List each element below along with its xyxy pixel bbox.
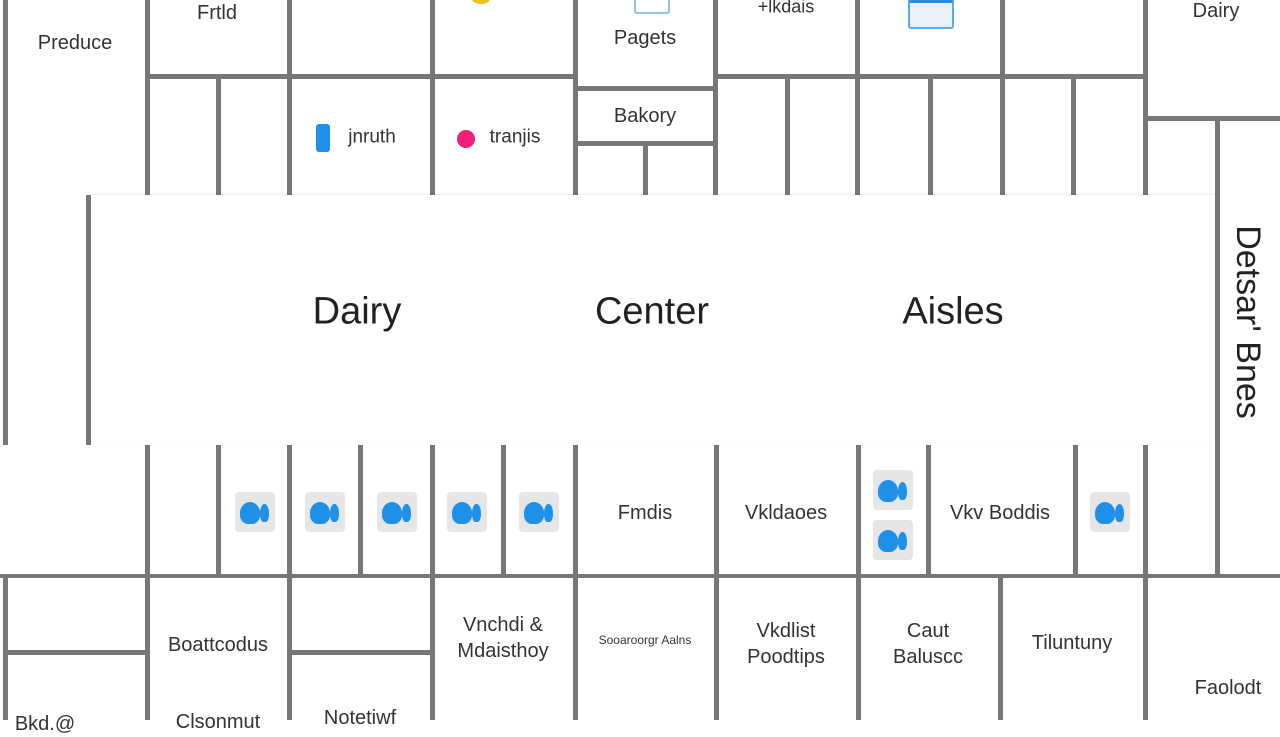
- label Vkdlist: Vkdlist: [757, 620, 815, 642]
- label Frtld: Frtld: [197, 2, 237, 24]
- label Caut: [893, 620, 963, 668]
- label Vkldaoes: Vkldaoes: [745, 502, 827, 524]
- label Vkdlist: [747, 620, 825, 668]
- vertical label right: Detsar' Bnes: [1229, 225, 1267, 419]
- label small: Sooaroorgr Aalns: [599, 633, 691, 647]
- label Bakory: Bakory: [614, 105, 676, 127]
- label Vkv Boddis: Vkv Boddis: [950, 502, 1050, 524]
- label Caut: Caut: [907, 620, 949, 642]
- icon yellow: [472, 0, 490, 4]
- top labels: Preduce: [38, 32, 112, 54]
- icon cube: [908, 0, 954, 29]
- label Notetiwf: Notetiwf: [324, 707, 396, 729]
- icon jnruth: [316, 124, 330, 152]
- center label: Dairy: Dairy: [313, 290, 401, 332]
- bottom labels: Boattcodus: [168, 634, 268, 656]
- icon tranjis: [457, 130, 475, 148]
- label Tiluntuny: Tiluntuny: [1032, 632, 1112, 654]
- label Vnchdi: Mdaisthoy: [457, 640, 549, 662]
- label Vnchdi: [457, 614, 549, 662]
- center band: [91, 195, 1215, 445]
- label Faolodt: Faolodt: [1195, 677, 1261, 699]
- label Dairy top right: Dairy: [1193, 0, 1239, 22]
- middle labels: Fmdis: [618, 502, 672, 524]
- label Vkdlist: Poodtips: [747, 646, 825, 668]
- label Vnchdi: Vnchdi &: [463, 614, 543, 636]
- icon box: [634, 0, 670, 14]
- label Pagets: Pagets: [614, 27, 676, 49]
- blue icons row: [235, 470, 1130, 560]
- label Caut: Baluscc: [893, 646, 963, 668]
- label partial bottom left: Bkd.@: [15, 713, 75, 735]
- label Clsonmut: Clsonmut: [176, 711, 260, 733]
- center label: Center: Center: [595, 290, 709, 332]
- center label: Aisles: Aisles: [902, 290, 1004, 332]
- label jnruth: jnruth: [348, 127, 396, 148]
- label tranjis: tranjis: [490, 127, 540, 148]
